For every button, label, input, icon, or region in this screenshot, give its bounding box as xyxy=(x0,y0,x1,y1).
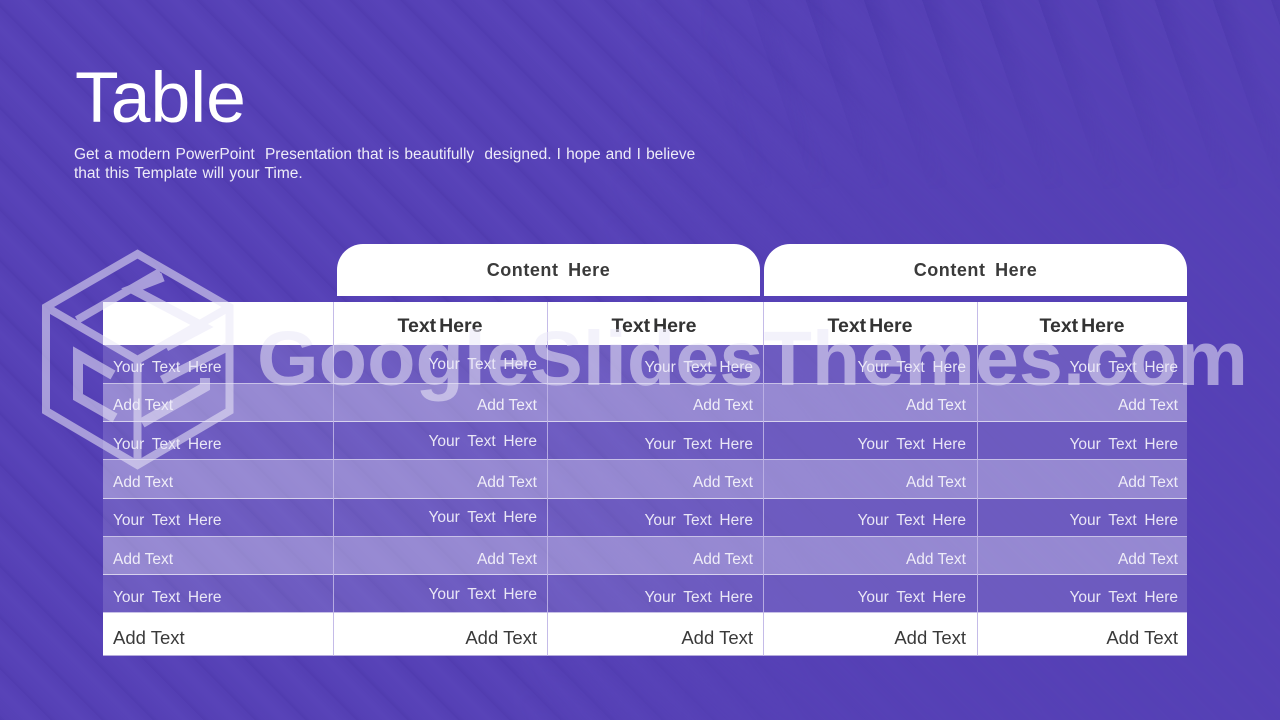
row 1: Your Text Here xyxy=(113,359,221,376)
row 1: Your Text Here xyxy=(645,359,753,376)
column header row: Text Here xyxy=(612,315,696,337)
row 7: Your Text Here xyxy=(1070,589,1178,606)
footer row: Add Text xyxy=(681,627,753,648)
row 1: Your Text Here xyxy=(1070,359,1178,376)
row 6 xyxy=(103,537,1187,575)
row 7: Your Text Here xyxy=(429,586,537,603)
row 3: Your Text Here xyxy=(429,433,537,450)
row 3: Your Text Here xyxy=(858,436,966,453)
watermark text: GoogleSlidesThemes.com xyxy=(257,316,1248,402)
row 5: Your Text Here xyxy=(858,512,966,529)
row 4: Add Text xyxy=(1118,474,1178,491)
group header: content 1: Content Here xyxy=(487,260,610,280)
row 4: Add Text xyxy=(906,474,966,491)
group header: content 2: Content Here xyxy=(914,260,1037,280)
row 4: Add Text xyxy=(477,474,537,491)
row 7: Your Text Here xyxy=(645,589,753,606)
title: Table xyxy=(75,58,246,138)
row 6: Add Text xyxy=(693,551,753,568)
row 4: Add Text xyxy=(693,474,753,491)
subtitle text block xyxy=(74,146,695,182)
row 2: Add Text xyxy=(693,397,753,414)
row 4 xyxy=(103,460,1187,499)
column header row xyxy=(103,302,1187,345)
row 2: Add Text xyxy=(113,397,173,414)
footer row: Add Text xyxy=(894,627,966,648)
row 2: Add Text xyxy=(906,397,966,414)
row 5: Your Text Here xyxy=(1070,512,1178,529)
row 7: Your Text Here xyxy=(858,589,966,606)
row 3 xyxy=(103,422,1187,460)
row 5: Your Text Here xyxy=(645,512,753,529)
row 2: Add Text xyxy=(1118,397,1178,414)
column header 1: Text Here xyxy=(398,315,482,337)
row 6: Add Text xyxy=(1118,551,1178,568)
group header: content 2 xyxy=(764,244,1187,296)
row 7 xyxy=(103,575,1187,613)
row 6: Add Text xyxy=(113,551,173,568)
row 7: Your Text Here xyxy=(113,589,221,606)
row 6: Add Text xyxy=(906,551,966,568)
row 1: Your Text Here xyxy=(858,359,966,376)
footer row: Add Text xyxy=(113,627,185,648)
row 4: Add Text xyxy=(113,474,173,491)
background: faint steep bands, upper right xyxy=(700,0,1280,200)
column header row: Text Here xyxy=(1040,315,1124,337)
row 1 xyxy=(103,345,1187,384)
row 2: Add Text xyxy=(477,397,537,414)
row 3: Your Text Here xyxy=(113,436,221,453)
row 2 xyxy=(103,384,1187,422)
row 5 xyxy=(103,499,1187,537)
subtitle text block: that this Template will your Time. xyxy=(74,165,303,182)
subtitle text block: Get a modern PowerPoint Presentation that is beautifully designed. I hope and I believe xyxy=(74,146,695,163)
row 6: Add Text xyxy=(477,551,537,568)
footer row: Add Text xyxy=(1106,627,1178,648)
column header row: Text Here xyxy=(828,315,912,337)
row 1: Your Text Here xyxy=(429,356,537,373)
footer row xyxy=(103,613,1187,656)
row 5: Your Text Here xyxy=(113,512,221,529)
row 5: Your Text Here xyxy=(429,509,537,526)
group header: content 1 xyxy=(337,244,760,296)
footer row: Add Text xyxy=(465,627,537,648)
row 3: Your Text Here xyxy=(1070,436,1178,453)
row 3: Your Text Here xyxy=(645,436,753,453)
